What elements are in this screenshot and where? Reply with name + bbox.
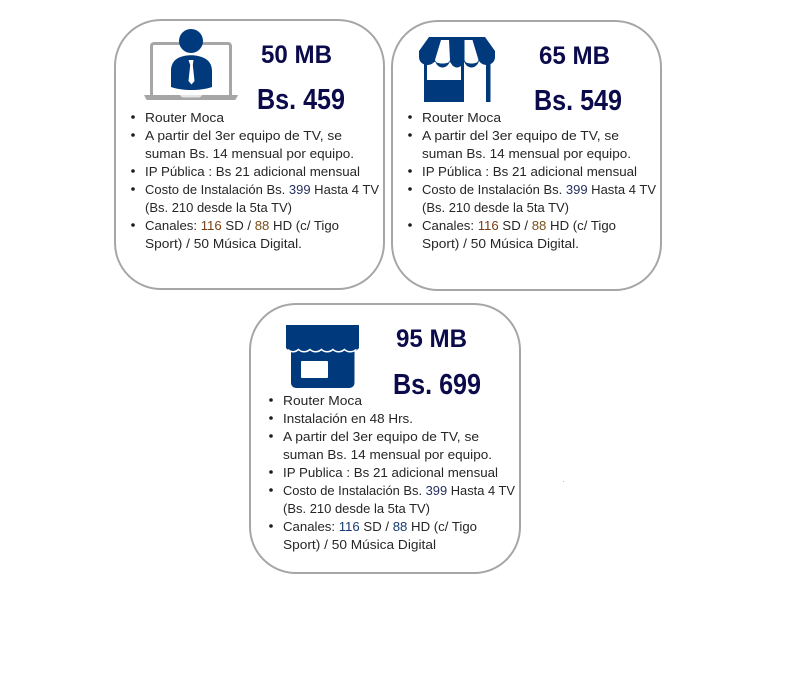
feature list: Instalación en 48 Hrs. <box>283 411 413 426</box>
feature list: suman Bs. 14 mensual por equipo. <box>145 146 354 161</box>
feature list: A partir del 3er equipo de TV, se <box>283 429 479 444</box>
heading: 50 MB: 50 MB <box>261 41 332 69</box>
feature list: Canales: 116 SD / 88 HD (c/ Tigo <box>145 218 339 233</box>
feature list: Canales: 116 SD / 88 HD (c/ Tigo <box>422 218 616 233</box>
panel: plan 50 MB <box>115 20 384 289</box>
feature list: (Bs. 210 desde la 5ta TV) <box>422 200 569 215</box>
feature list: IP Pública : Bs 21 adicional mensual <box>145 164 360 179</box>
feature list: IP Pública : Bs 21 adicional mensual <box>422 164 637 179</box>
price: Bs. 459: Bs. 459 <box>257 84 345 116</box>
panel: plan 95 MB <box>250 304 520 573</box>
icon: closed shop <box>286 325 359 388</box>
feature list: Router Moca <box>283 393 363 408</box>
feature list: Canales: 116 SD / 88 HD (c/ Tigo <box>283 519 477 534</box>
price: Bs. 549: Bs. 549 <box>534 85 622 117</box>
heading: 65 MB: 65 MB <box>539 42 610 70</box>
feature list: A partir del 3er equipo de TV, se <box>422 128 619 143</box>
feature list: IP Publica : Bs 21 adicional mensual <box>283 465 498 480</box>
feature list: Costo de Instalación Bs. 399 Hasta 4 TV <box>422 182 656 197</box>
feature list: Router Moca <box>145 110 225 125</box>
feature list: Costo de Instalación Bs. 399 Hasta 4 TV <box>283 483 515 498</box>
feature list: suman Bs. 14 mensual por equipo. <box>422 146 631 161</box>
feature list: (Bs. 210 desde la 5ta TV) <box>145 200 292 215</box>
feature list: Sport) / 50 Música Digital <box>283 537 436 552</box>
feature list: Costo de Instalación Bs. 399 Hasta 4 TV <box>145 182 379 197</box>
heading: 95 MB: 95 MB <box>396 325 467 353</box>
feature list: (Bs. 210 desde la 5ta TV) <box>283 501 430 516</box>
icon: person in laptop <box>144 29 238 100</box>
feature list <box>131 110 379 251</box>
feature list: Router Moca <box>422 110 502 125</box>
feature list <box>269 393 515 552</box>
feature list: Sport) / 50 Música Digital. <box>145 236 302 251</box>
icon: storefront with awning <box>419 37 495 102</box>
feature list: A partir del 3er equipo de TV, se <box>145 128 342 143</box>
feature list: Sport) / 50 Música Digital. <box>422 236 579 251</box>
price: Bs. 699: Bs. 699 <box>393 369 481 401</box>
feature list: suman Bs. 14 mensual por equipo. <box>283 447 492 462</box>
panel: plan 65 MB <box>392 21 661 290</box>
feature list <box>408 110 656 251</box>
